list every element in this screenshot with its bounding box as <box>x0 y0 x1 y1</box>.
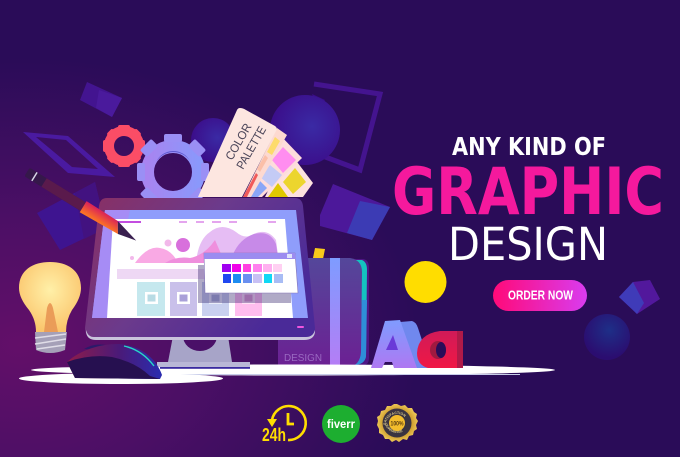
icon: big sphere <box>270 94 340 165</box>
icon: cube left <box>37 182 106 250</box>
mouse pad ellipse <box>19 373 223 384</box>
palette card 4 <box>265 150 313 197</box>
monitor screen <box>92 210 308 318</box>
book label: DESIGN <box>284 353 322 364</box>
platform <box>31 364 555 376</box>
icon: wire frame left <box>23 132 115 177</box>
letter A <box>400 321 431 368</box>
book <box>278 258 369 367</box>
monitor power light <box>297 326 304 328</box>
icon: red gear <box>103 125 145 167</box>
icon: fiverr badge <box>322 405 360 443</box>
icon: pen <box>24 166 140 245</box>
palette card front <box>198 108 277 197</box>
icon: light bulb <box>19 262 81 353</box>
screen page <box>107 219 293 318</box>
button: order now <box>493 280 587 311</box>
book spine <box>330 258 340 367</box>
book cover <box>340 258 362 367</box>
letters Aa <box>371 320 463 368</box>
color palette fan <box>198 108 313 197</box>
icon: satisfaction seal: SATISFACTION <box>384 412 406 425</box>
headline <box>392 132 664 271</box>
icon: dark sphere <box>584 314 630 360</box>
icon: purple gear <box>137 134 209 210</box>
book page edge <box>350 259 369 366</box>
icon: rectangle frame <box>314 84 380 170</box>
yellow tab <box>313 248 325 259</box>
screen wave chart <box>130 227 279 263</box>
icon: 24h delivery: 24h <box>262 425 286 445</box>
screen search bar <box>117 269 291 279</box>
icon: small sphere <box>191 118 235 162</box>
icon: satisfaction seal: GUARANTEE <box>385 424 403 433</box>
color swatch window <box>204 253 298 293</box>
icon: computer mouse <box>67 344 162 379</box>
button: order now: ORDER NOW <box>508 288 574 302</box>
heading: any kind of: ANY KIND OF <box>452 132 606 161</box>
icon: yellow circle <box>404 261 446 303</box>
window shadow <box>198 265 291 303</box>
screen nav <box>115 221 276 223</box>
palette label: COLOR <box>222 121 255 162</box>
heading: design: DESIGN <box>448 218 608 271</box>
letter a <box>417 331 463 368</box>
monitor stand <box>157 336 250 367</box>
screen image tiles <box>137 282 262 316</box>
icon: cube center <box>320 184 390 240</box>
icon: satisfaction seal: 100% <box>390 422 404 428</box>
monitor <box>85 198 315 367</box>
monitor frame <box>85 198 315 337</box>
book back cover <box>278 258 330 367</box>
palette card 3 <box>250 135 302 197</box>
icon: cube top left <box>80 82 122 117</box>
palette card 2 <box>243 128 287 197</box>
icon: fiverr badge: fiverr <box>327 419 355 431</box>
palette label: PALETTE <box>233 124 269 172</box>
icon: cube right <box>619 280 660 314</box>
icon: 24h delivery <box>262 406 306 445</box>
icon: satisfaction seal <box>377 404 418 442</box>
